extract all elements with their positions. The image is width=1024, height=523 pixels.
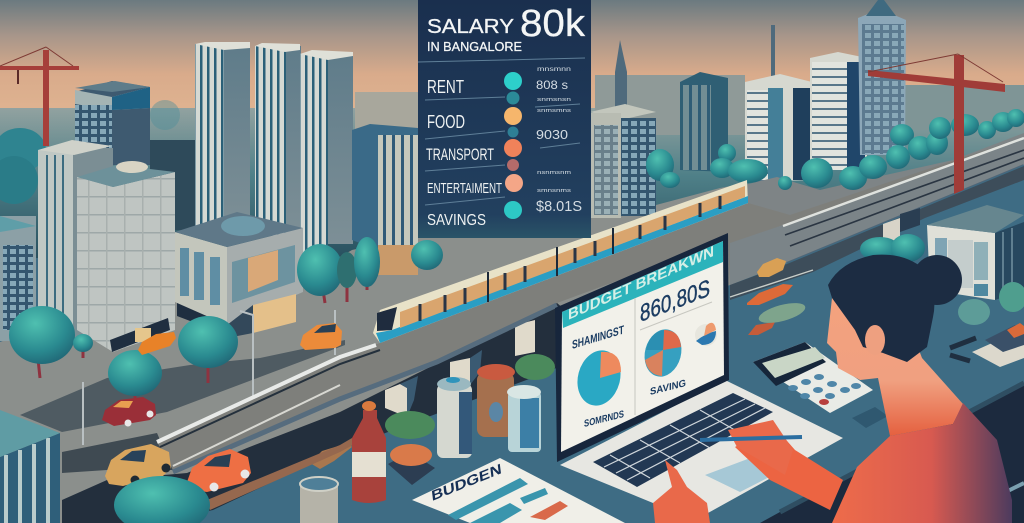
building: far back block [75, 81, 150, 165]
small card on desk [852, 407, 888, 428]
panel heading: 80k [520, 3, 586, 45]
stylus pen [700, 437, 802, 440]
left ground and pavement [0, 183, 747, 523]
bushes behind desk items [385, 354, 555, 439]
panel heading: IN BANGALORE [427, 39, 522, 54]
building: far left blue [0, 216, 36, 341]
dark space under desk [760, 383, 1024, 523]
stacked plate [388, 444, 435, 485]
screen labels: SHAMINGST [572, 323, 624, 352]
right buildings [590, 0, 906, 218]
trees left cluster [9, 237, 443, 398]
pointing hand [653, 460, 710, 523]
screen divider [635, 298, 712, 415]
metro train [373, 180, 748, 343]
rust strip at desk edge [207, 438, 353, 510]
lower road cars [105, 443, 352, 492]
budget values: 9030 [536, 127, 568, 142]
writing hand [728, 420, 793, 475]
budget values: $8.01S [536, 198, 582, 215]
sky background [0, 0, 1024, 120]
street lamps [83, 310, 335, 445]
budget category labels: FOOD [427, 112, 465, 132]
building: left tall block [38, 140, 113, 338]
person [653, 255, 1012, 523]
bridge pillars [385, 320, 535, 417]
budget values [536, 67, 582, 215]
food tin foreground [300, 477, 338, 523]
right ground above bridge [730, 133, 1024, 248]
trackpad [705, 457, 777, 492]
right bushes [860, 234, 925, 262]
middle road [62, 433, 173, 473]
building: towers centre left [195, 42, 353, 259]
hair [828, 255, 934, 362]
budget values: snmsnsn [537, 97, 571, 103]
arm [735, 425, 843, 510]
right crane [868, 54, 1005, 213]
panel heading: SALARY [427, 16, 514, 38]
hair bun [912, 255, 962, 305]
budget values: mnsmnn [537, 67, 571, 73]
laptop [555, 233, 843, 523]
budget values: smnsnms [537, 188, 572, 194]
budget paper: BUDGEN [431, 461, 502, 505]
trees above right bridge [646, 109, 1024, 190]
cars on street [102, 323, 342, 426]
pie chart large [571, 346, 627, 410]
budget category labels: ENTERTAIMENT [427, 180, 502, 197]
left crane [0, 47, 79, 146]
screen labels: SAVING [650, 378, 686, 398]
building: blue block behind panel [352, 124, 418, 275]
laptop base [560, 380, 843, 523]
tree bottom left [114, 476, 210, 523]
budget category labels: SAVINGS [427, 212, 486, 229]
tin can [437, 377, 472, 458]
budget category labels [426, 77, 502, 229]
desk side plants [958, 282, 1024, 325]
bridge deck with rails [157, 137, 1024, 472]
screen white [561, 241, 724, 452]
building: right foreground [927, 205, 1024, 300]
neck and face [827, 298, 963, 436]
keyboard [593, 393, 773, 487]
shirt [832, 403, 1012, 523]
screen title: BUDGET BREAKWN [568, 243, 714, 324]
upper road [20, 340, 345, 432]
screen header [562, 241, 723, 328]
screen figure: 860,80S [640, 275, 710, 328]
right road under bridge [730, 166, 1024, 300]
panel: salary budget board [418, 0, 591, 238]
budget category labels: TRANSPORT [426, 145, 494, 164]
calculator [753, 342, 873, 413]
pie chart small [695, 323, 717, 346]
budget category dots [504, 72, 523, 219]
desk surface and right foreground ground [213, 165, 1024, 523]
pie chart medium [639, 325, 687, 381]
budget values: snmsmns [537, 108, 572, 114]
screen labels: SOMRNDS [584, 409, 624, 430]
road cars behind desk [747, 258, 807, 335]
distant city haze [0, 75, 1024, 258]
building: low block [175, 212, 303, 338]
budget paper [412, 458, 625, 523]
lower road and under bridge shadow [62, 303, 600, 523]
stylus and books [950, 323, 1024, 367]
screen labels [572, 323, 686, 430]
red can [477, 364, 515, 437]
laptop screen frame [555, 233, 729, 462]
budget category labels: RENT [427, 77, 464, 97]
bottle [352, 401, 386, 503]
ear [865, 325, 885, 355]
panel heading [427, 3, 586, 54]
budget values: 808 s [536, 78, 568, 92]
budget values: nsnmsnm [537, 170, 571, 176]
building: front grey block [77, 161, 175, 352]
drinking glass [507, 385, 541, 452]
building: bottom left [0, 410, 60, 523]
